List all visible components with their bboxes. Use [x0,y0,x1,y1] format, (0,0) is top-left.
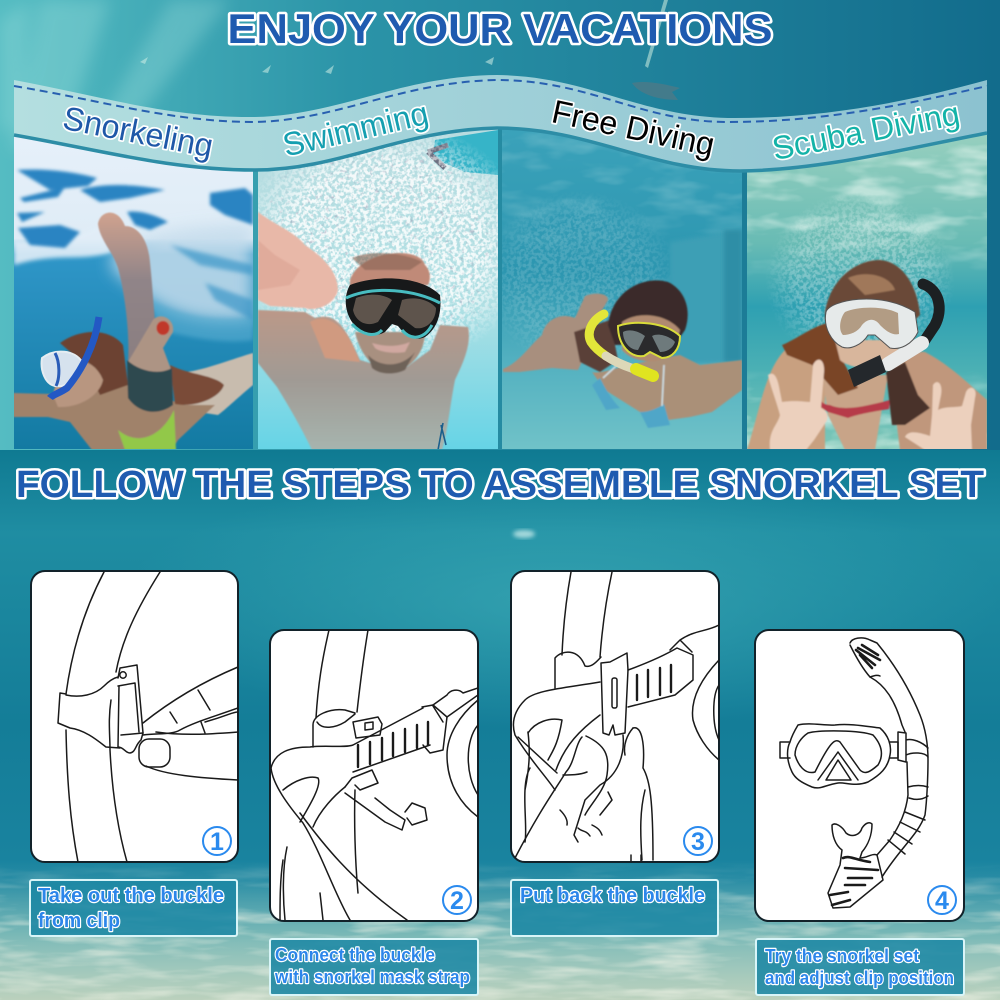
caption: step 2: with snorkel mask strap [274,966,470,987]
upper underwater background [0,0,1000,450]
hand [258,212,338,309]
torso and arm [592,355,742,420]
step number 1: 1 [210,828,224,856]
caption: step 3 [511,880,718,936]
illustration: connecting buckle [271,630,478,920]
title: enjoy your vacations: ENJOY YOUR VACATIONS [228,5,772,52]
face [835,340,905,368]
caption: step 4: Try the snorkel set [765,945,919,966]
face [53,360,103,407]
step number 3: 3 [691,828,705,856]
green bikini [118,410,176,450]
label: snorkeling: Snorkeling [60,99,216,164]
step number 3 [684,827,712,856]
photo: swimming [258,128,498,450]
hair and forehead [350,253,430,290]
diving mask [42,352,82,386]
caption: step 4: and adjust clip position [765,967,954,988]
red bikini [820,400,890,418]
arm and shoulder right [890,352,987,450]
swimmer torso and arm [13,380,215,450]
raised arm [98,213,158,362]
snorkel clip [898,732,928,762]
lower face [354,331,426,366]
wavy banner [14,75,987,171]
lower underwater background with sandy sea floor [0,450,1000,1000]
scuba snorkel [888,284,939,364]
heading: follow the steps: FOLLOW THE STEPS TO ASSEMBLE SNORKEL SET [16,464,984,506]
hair bottom [782,323,858,395]
palm and thumb [128,316,173,372]
step number 4 [928,886,956,915]
panel: step 4 [755,630,964,921]
mouthpiece [848,355,886,387]
caption: step 3: Put back the buckle [520,885,705,907]
left hand [768,360,828,450]
bikini [592,378,670,428]
free diving mask [618,323,680,358]
swimmer legs [185,353,253,415]
step number 4: 4 [935,887,949,915]
blue snorkel [50,317,99,398]
face [622,315,680,361]
caption: step 1: from clip [38,910,120,932]
yellow snorkel [589,314,653,376]
caption: step 1 [30,880,237,936]
swimmer legs and foot [503,294,608,372]
caption: step 2: Connect the buckle [275,944,435,965]
torso [822,375,888,450]
caption: step 2 [270,939,478,995]
illustration: removing buckle [58,572,238,862]
mouthpiece [828,823,883,908]
photo: snorkeling [13,135,253,450]
panel: step 2 [270,630,478,921]
arm and shoulder left [747,350,825,450]
snorkel tube [850,638,928,877]
hair top [825,260,920,320]
label: swimming: Swimming [279,94,432,163]
step number 2: 2 [450,887,464,915]
striped fish [632,82,680,100]
chest and arm [258,310,469,450]
hair [608,280,688,345]
lower hair [574,320,618,372]
label: free diving: Free Diving [549,93,718,163]
photo: scuba diving [747,133,987,450]
step number 2 [443,886,471,915]
mask [780,724,898,788]
right hand [905,382,976,450]
illustration: putting back buckle [513,572,719,862]
head hair [60,332,128,395]
panel: step 3 [511,571,719,862]
photo: free diving [502,128,742,449]
step number 1 [203,827,231,856]
scuba mask [825,299,918,348]
label: scuba diving: Scuba Diving [769,94,963,167]
caption: step 1: Take out the buckle [38,885,224,907]
back hair [170,365,224,405]
panel: step 1 [31,571,238,862]
caption: step 4 [756,939,964,995]
dark forearm [127,360,173,412]
illustration: mask and snorkel set [780,638,928,908]
swimming mask [346,278,440,339]
